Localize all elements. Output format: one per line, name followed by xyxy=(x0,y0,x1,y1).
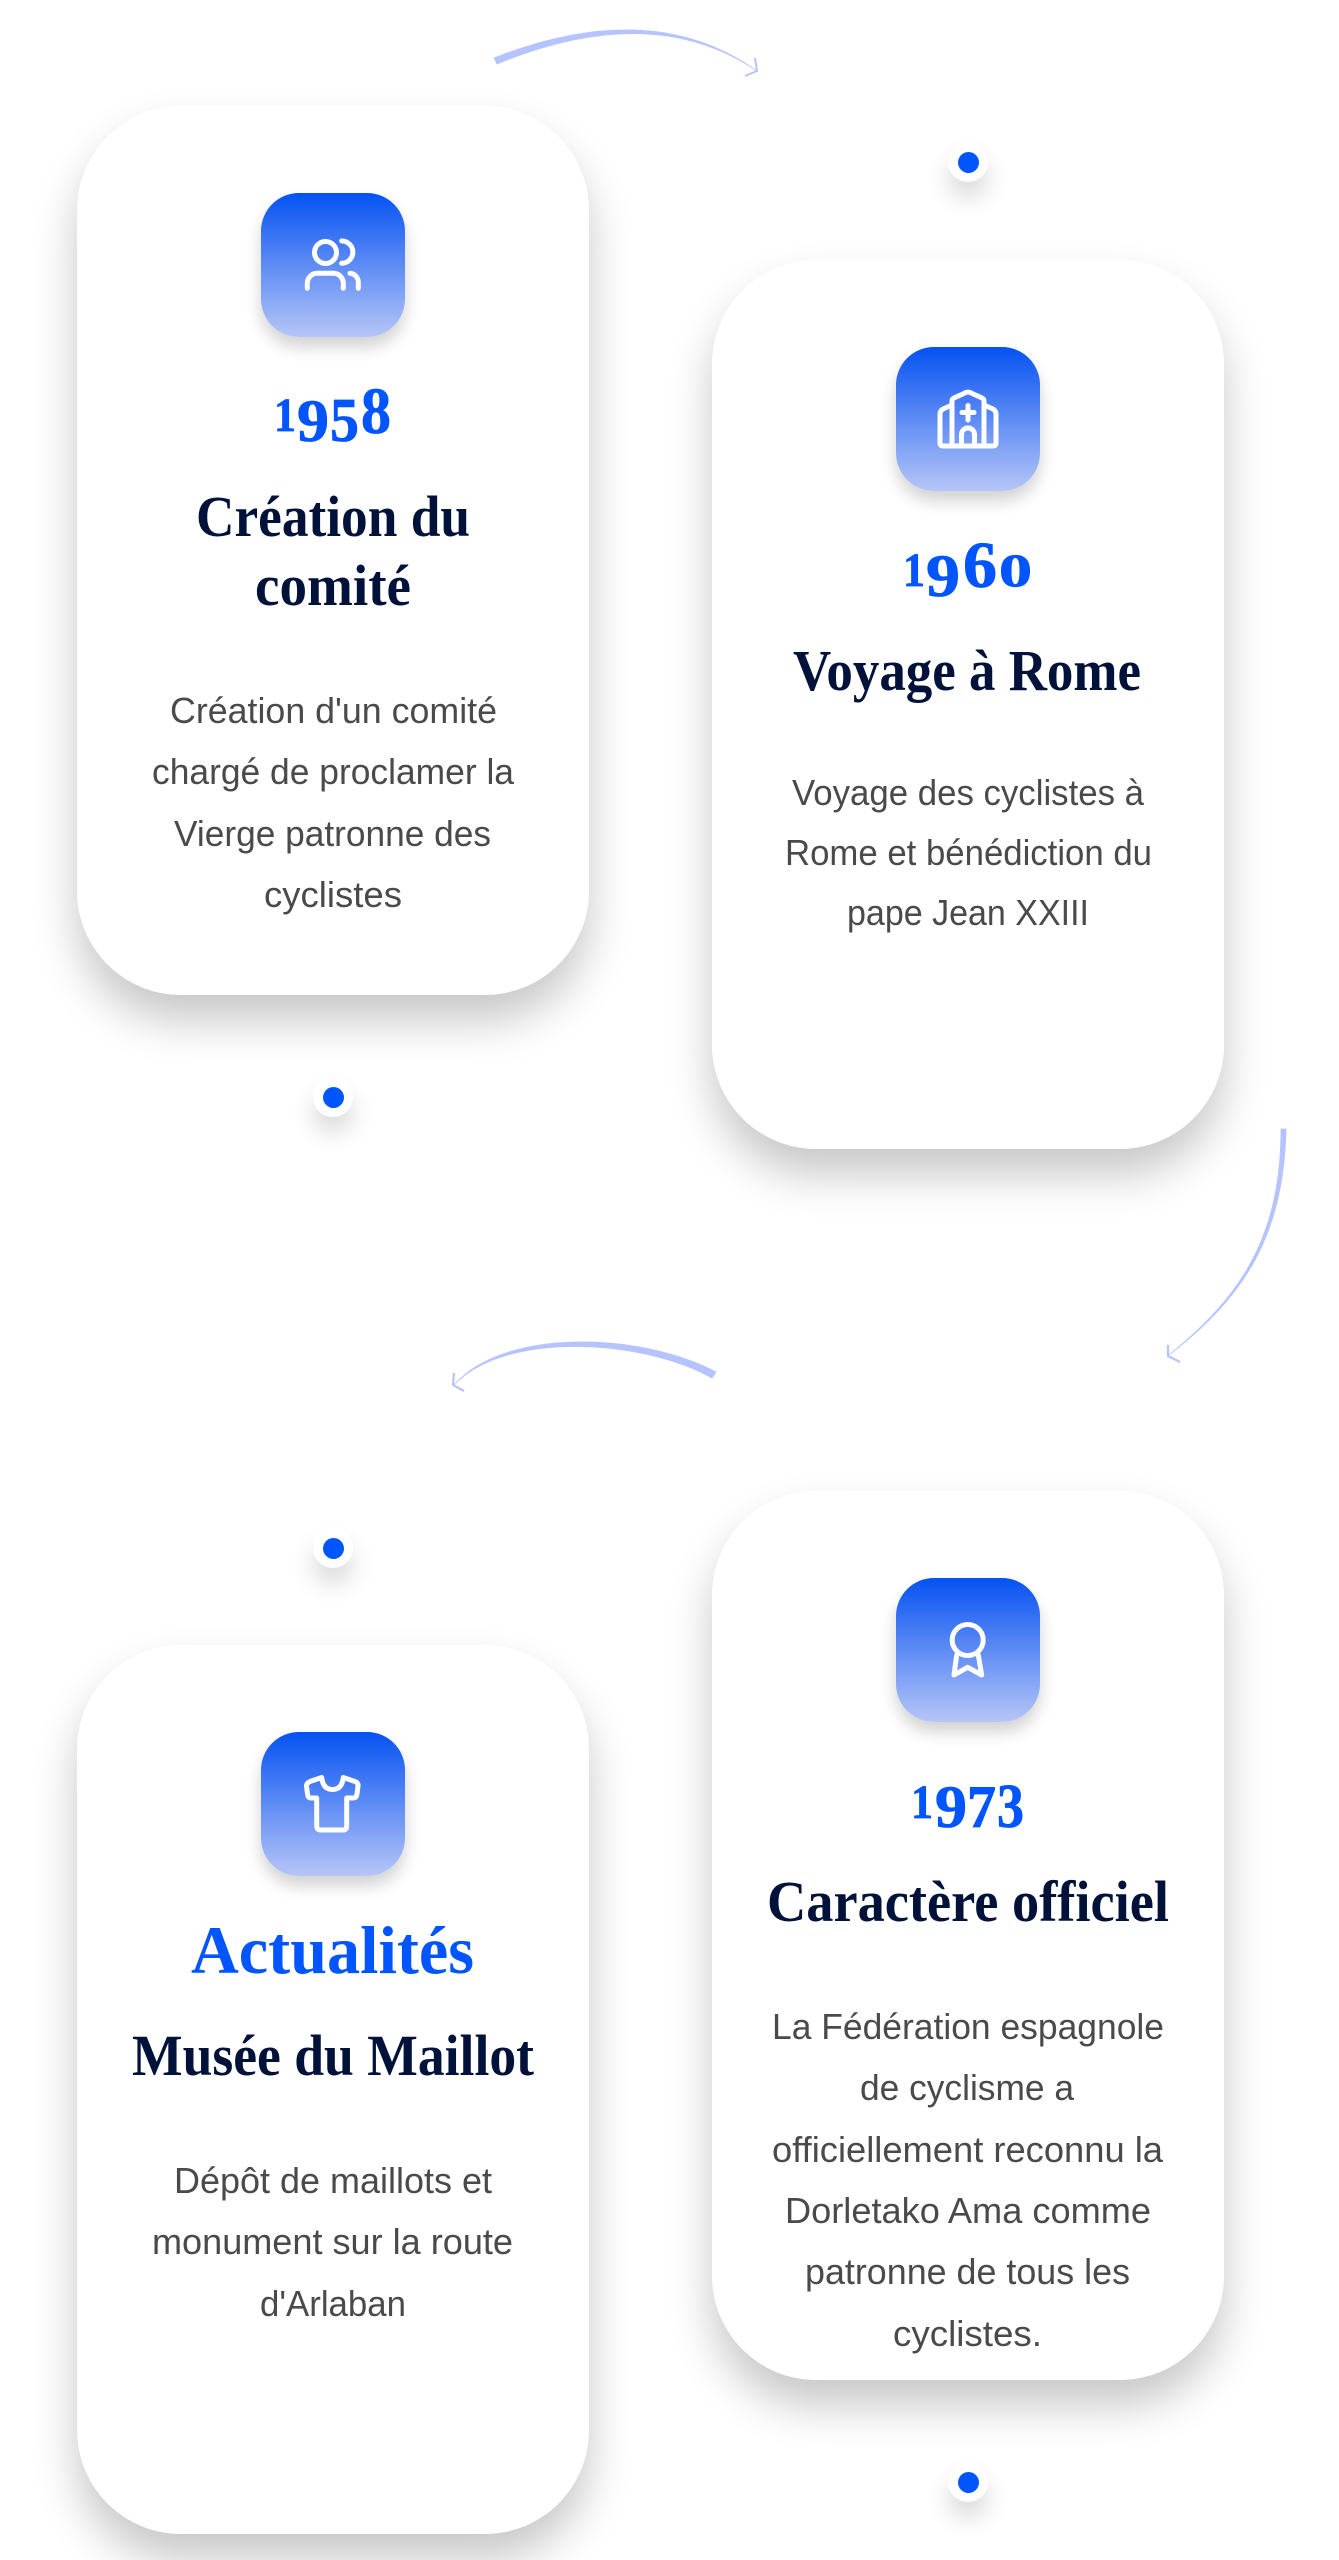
text: description Actualités: Dépôt de maillots et xyxy=(174,2160,492,2201)
text: description 1958: Création d'un comité xyxy=(170,690,497,731)
heading: Musée du Maillot: Musée du Maillot xyxy=(132,2023,535,2088)
text: description 1973: patronne de tous les xyxy=(805,2251,1130,2292)
heading: Création du comité: comité xyxy=(255,553,411,618)
text: description 1973: Dorletako Ama comme xyxy=(785,2190,1151,2231)
year: 1960: 1 xyxy=(903,544,925,597)
icon: rosette xyxy=(896,1578,1040,1722)
year: 1973: 9 xyxy=(935,1774,967,1840)
year: 1958: 8 xyxy=(361,375,391,448)
text: description 1973: de cyclisme a xyxy=(860,2067,1075,2108)
text: description 1960 xyxy=(785,772,1152,933)
heading: Voyage à Rome: Voyage à Rome xyxy=(793,638,1141,703)
text: description 1958 xyxy=(152,690,515,915)
year: 1973 xyxy=(911,1773,1024,1841)
year: 1958: 5 xyxy=(330,387,359,455)
year: 1973: 1 xyxy=(911,1776,933,1829)
text: description 1958: chargé de proclamer la xyxy=(152,751,515,792)
timeline dot: card 1958 xyxy=(313,1077,353,1117)
icon: people xyxy=(261,193,405,337)
panel: 1960 card xyxy=(712,260,1224,1149)
year: 1960 xyxy=(903,529,1032,609)
heading: Création du comité: Création du xyxy=(196,484,470,549)
panel: 1958 card xyxy=(77,106,589,995)
arrow: middle curve to the left xyxy=(452,1342,716,1392)
panel: 1973 card xyxy=(712,1491,1224,2380)
panel: Actualités card xyxy=(77,1645,589,2534)
heading: Création du comité xyxy=(196,484,470,618)
timeline dot: card 1973 xyxy=(948,2462,988,2502)
text: description Actualités xyxy=(152,2160,513,2324)
year: 1960: 0 xyxy=(999,545,1032,597)
icon: church xyxy=(896,347,1040,491)
text: description 1960: pape Jean XXIII xyxy=(847,892,1089,933)
year: 1958: 1 xyxy=(274,389,296,442)
heading: Actualités: Actualités xyxy=(191,1912,474,1988)
timeline dot: card 1960 xyxy=(948,142,988,182)
text: description 1973 xyxy=(772,2006,1164,2354)
year: 1958: 9 xyxy=(297,388,329,454)
text: description Actualités: d'Arlaban xyxy=(260,2283,406,2324)
heading: Caractère officiel: Caractère officiel xyxy=(767,1869,1169,1934)
year: 1958 xyxy=(274,375,391,455)
text: description 1958: cyclistes xyxy=(264,874,402,915)
year: 1960: 6 xyxy=(963,529,997,602)
year: 1973: 7 xyxy=(967,1774,996,1840)
text: description 1958: Vierge patronne des xyxy=(174,813,491,854)
text: description 1960: Rome et bénédiction du xyxy=(785,832,1152,873)
icon: jersey xyxy=(261,1732,405,1876)
timeline dot: card Actualités xyxy=(313,1528,353,1568)
text: description Actualités: monument sur la route xyxy=(152,2221,513,2262)
text: description 1973: officiellement reconnu la xyxy=(772,2129,1164,2170)
text: description 1973: cyclistes. xyxy=(893,2313,1042,2354)
year: 1960: 9 xyxy=(926,543,960,609)
arrow: top curve to the right xyxy=(494,30,758,77)
text: description 1973: La Fédération espagnole xyxy=(772,2006,1164,2047)
text: description 1960: Voyage des cyclistes à xyxy=(792,772,1145,813)
year: 1973: 3 xyxy=(997,1773,1024,1841)
arrow: right curve going down xyxy=(1166,1128,1286,1363)
